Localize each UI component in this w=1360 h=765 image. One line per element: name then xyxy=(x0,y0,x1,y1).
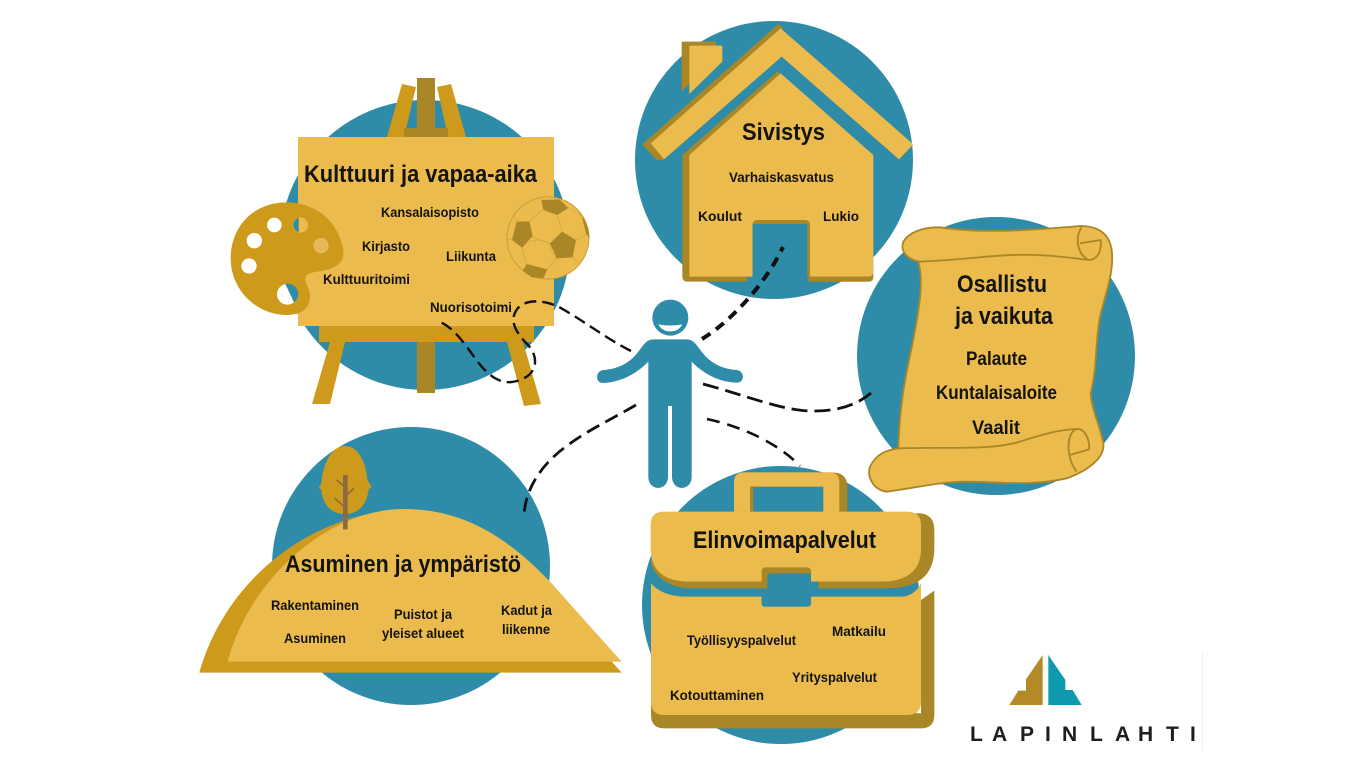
icon: house xyxy=(642,24,913,282)
heading: Kulttuuri ja vapaa-aika: Kulttuuri ja vapaa-aika xyxy=(304,161,538,188)
text block: culture services xyxy=(323,204,512,315)
arrow: path to Asuminen ja ympäristö xyxy=(524,405,636,516)
icon: smiling person xyxy=(597,300,743,488)
arrow: path to Kulttuuri ja vapaa-aika xyxy=(438,301,631,382)
icon: easel xyxy=(298,78,554,406)
panel: Elinvoimapalvelut xyxy=(642,466,934,744)
text block: culture services: Kulttuuritoimi xyxy=(323,271,410,287)
text block: housing services: Rakentaminen xyxy=(271,597,359,613)
text block: vitality services: Kotouttaminen xyxy=(670,687,764,703)
icon: logo mark xyxy=(1009,655,1082,705)
text block: culture services: Kirjasto xyxy=(362,238,410,254)
heading: Elinvoimapalvelut: Elinvoimapalvelut xyxy=(693,527,876,554)
heading: Asuminen ja ympäristö: Asuminen ja ympäristö xyxy=(285,551,521,578)
text block: participation items: Palaute xyxy=(966,349,1027,370)
text block: housing services xyxy=(271,597,552,646)
text block: participation items xyxy=(936,349,1057,439)
text block: culture services: Kansalaisopisto xyxy=(381,204,479,220)
text block: housing services: yleiset alueet xyxy=(382,625,464,641)
backdrop circle: housing xyxy=(272,427,550,705)
heading: Sivistys: Sivistys xyxy=(742,119,825,146)
icon: paint palette xyxy=(231,202,344,315)
text block: vitality services xyxy=(670,623,886,703)
icon: football xyxy=(507,197,589,279)
heading: Osallistu ja vaikuta: ja vaikuta xyxy=(954,303,1054,330)
text block: participation items: Kuntalaisaloite xyxy=(936,383,1057,404)
text block: housing services: liikenne xyxy=(502,621,550,637)
panel: Osallistu ja vaikuta xyxy=(857,217,1135,495)
logo: Lapinlahti xyxy=(970,655,1196,746)
text block: housing services: Asuminen xyxy=(284,630,346,646)
text block: education services: Varhaiskasvatus xyxy=(729,169,834,185)
text block: vitality services: Yrityspalvelut xyxy=(792,669,877,685)
icon: scroll xyxy=(869,226,1112,492)
text block: education services: Lukio xyxy=(823,208,859,224)
backdrop circle: culture xyxy=(280,100,570,390)
text block: housing services: Kadut ja xyxy=(501,602,552,618)
text block: culture services: Liikunta xyxy=(446,248,496,264)
text block: housing services: Puistot ja xyxy=(394,606,452,622)
text block: culture services: Nuorisotoimi xyxy=(430,299,512,315)
arrow: path to Elinvoimapalvelut xyxy=(707,419,800,466)
icon: hill and tree xyxy=(199,446,622,673)
text block: vitality services: Työllisyyspalvelut xyxy=(687,632,796,648)
backdrop circle: participation xyxy=(857,217,1135,495)
arrow: path to Osallistu ja vaikuta xyxy=(703,384,871,411)
icon: briefcase xyxy=(651,472,934,728)
text block: education services: Koulut xyxy=(698,208,742,224)
logo wordmark: LAPINLAHTI xyxy=(970,723,1196,746)
heading: Osallistu ja vaikuta: Osallistu xyxy=(957,271,1047,298)
arrow: path to Sivistys xyxy=(702,247,783,339)
text block: participation items: Vaalit xyxy=(972,418,1021,439)
text block: vitality services: Matkailu xyxy=(832,623,886,639)
backdrop circle: education xyxy=(635,21,913,299)
text block: education services xyxy=(698,169,859,224)
panel: Asuminen ja ympäristö xyxy=(199,427,622,705)
heading: Osallistu ja vaikuta xyxy=(954,271,1054,330)
backdrop circle: vitality xyxy=(642,466,920,744)
panel: Kulttuuri ja vapaa-aika xyxy=(231,78,589,406)
panel: Sivistys xyxy=(635,21,913,299)
